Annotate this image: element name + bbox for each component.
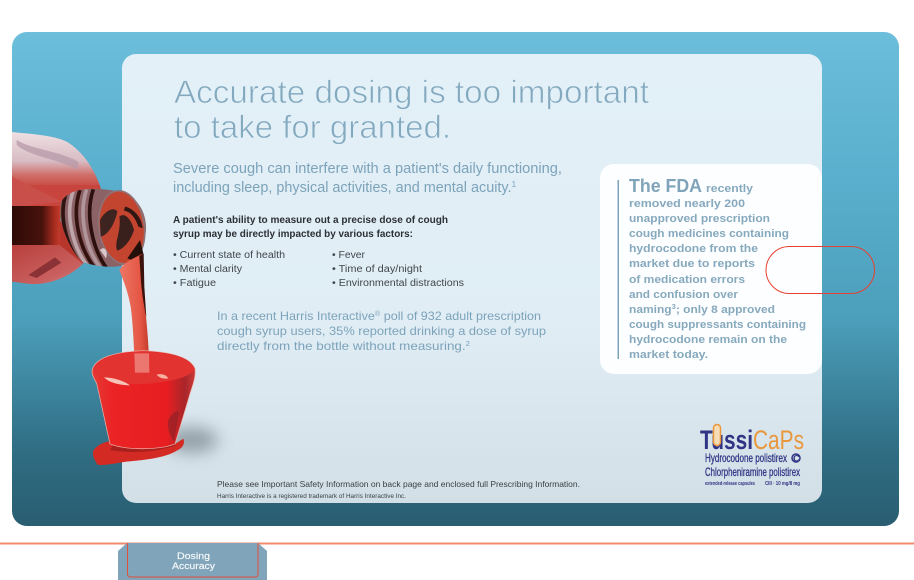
TussiCaps logo: CaPs	[753, 425, 804, 455]
FDA callout: cough suppressants containing	[629, 319, 806, 331]
FDA callout: removed nearly 200	[629, 198, 745, 210]
factors list: • Mental clarity	[173, 264, 242, 275]
subtitle: Severe cough can interfere with a patient's daily functioning,	[173, 161, 562, 177]
inner content panel	[122, 54, 822, 503]
poll paragraph	[217, 309, 546, 353]
illustration: bottle pouring syrup into cup	[12, 130, 195, 465]
FDA callout: of medication errors	[629, 274, 745, 286]
cup	[92, 351, 195, 449]
factors list: • Time of day/night	[332, 264, 422, 275]
factors list: • Fatigue	[173, 278, 216, 289]
poll paragraph: 2	[466, 341, 470, 348]
FDA callout: The FDA	[629, 176, 702, 196]
TussiCaps logo: CIII · 10 mg/8 mg	[765, 481, 800, 487]
poll paragraph: ®	[375, 310, 381, 318]
red outline highlight	[766, 246, 874, 294]
factors intro: syrup may be directly impacted by various factors:	[173, 229, 413, 240]
stream in cup	[134, 353, 149, 373]
FDA callout: 3	[672, 304, 676, 311]
factors list	[173, 250, 464, 289]
poll paragraph: directly from the bottle without measuring.	[217, 339, 439, 353]
FDA callout: market due to reports	[629, 258, 755, 270]
TussiCaps logo	[700, 424, 804, 487]
TussiCaps logo: Chlorpheniramine polistirex	[705, 465, 800, 479]
title: Accurate dosing is too important	[174, 74, 649, 110]
factors list: • Environmental distractions	[332, 278, 464, 289]
TussiCaps logo: C	[793, 454, 800, 464]
TussiCaps logo: Hydrocodone polistirex	[705, 451, 787, 465]
bottle mouth	[94, 188, 149, 267]
syrup stream	[119, 253, 149, 373]
title: to take for granted.	[174, 109, 451, 145]
FDA callout: hydrocodone remain on the	[629, 334, 787, 346]
poll paragraph: poll of 932 adult prescription	[380, 309, 541, 323]
poll paragraph: In a recent Harris Interactive	[217, 309, 368, 323]
cup shadow	[166, 427, 218, 453]
tab: dosing accuracy: Accuracy	[172, 561, 216, 571]
FDA callout: hydrocodone from the	[629, 243, 758, 255]
FDA callout: and confusion over	[629, 289, 739, 301]
factors intro: A patient's ability to measure out a precise dose of cough	[173, 215, 448, 226]
FDA callout: market today.	[629, 349, 708, 361]
FDA callout: cough medicines containing	[629, 228, 789, 240]
TussiCaps logo: extended-release capsules	[705, 481, 755, 487]
bottle body	[12, 130, 105, 287]
puddle	[93, 439, 184, 465]
subtitle: 1	[512, 180, 517, 189]
factors list: • Fever	[332, 250, 366, 261]
TussiCaps logo: Tussi	[700, 425, 753, 455]
FDA callout: naming	[629, 304, 668, 316]
FDA callout	[600, 164, 822, 374]
factors list: • Current state of health	[173, 250, 285, 261]
divider line	[0, 542, 914, 544]
factors intro	[173, 215, 448, 240]
footer notes	[217, 479, 580, 500]
title	[174, 74, 649, 145]
subtitle: including sleep, physical activities, and mental acuity.	[173, 180, 514, 196]
subtitle	[173, 161, 562, 196]
footer notes: Harris Interactive is a registered trademark of Harris Interactive Inc.	[217, 494, 406, 500]
footer notes: Please see Important Safety Information on back page and enclosed full Prescribing Information.	[217, 479, 580, 489]
FDA callout: ; only 8 approved	[676, 304, 775, 316]
cup rim	[93, 351, 194, 384]
bottle neck threads	[60, 188, 146, 267]
FDA callout: unapproved prescription	[629, 213, 770, 225]
tab: dosing accuracy	[118, 543, 267, 580]
FDA callout: recently	[706, 183, 754, 195]
tab: dosing accuracy: Dosing	[177, 551, 210, 561]
poll paragraph: cough syrup users, 35% reported drinking a dose of syrup	[217, 324, 546, 338]
